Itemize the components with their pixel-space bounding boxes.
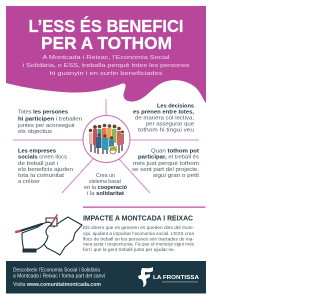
impact body text: cipi, ajudant a impulsar l’economia social. L’ESS crea <box>83 231 194 236</box>
text: decisions: de manera col·lectiva, <box>135 116 194 122</box>
impact body text: llocs de treball on les persones són tractades de ma- <box>83 236 194 241</box>
text: cooperation <box>84 173 127 197</box>
text: participation <box>17 110 82 135</box>
text: cooperation: sistema basat <box>89 179 122 185</box>
title: L’ESS ÉS BENEFICI <box>28 15 184 36</box>
text: participation: els objectius <box>18 129 52 135</box>
text: social enterprises: a créixer <box>18 179 40 185</box>
connector lines <box>13 99 199 193</box>
impact divider <box>83 206 206 208</box>
text: everyone participates: Quan tothom pot <box>151 148 199 154</box>
text: decisions: es prenen entre totes, <box>133 110 195 116</box>
text: everyone participates <box>132 148 200 179</box>
text: decisions <box>133 104 195 134</box>
text: social enterprises <box>18 148 73 185</box>
text: social enterprises: de treball just i <box>18 161 58 167</box>
intro text <box>22 55 190 77</box>
text: cooperation: Crea un <box>96 173 115 179</box>
footer panel <box>6 261 206 294</box>
text: cooperation: i la solidaritat <box>87 191 124 197</box>
text: decisions: tothom hi tingui veu <box>138 128 194 134</box>
text: social enterprises: Les empreses <box>18 148 56 154</box>
footer text: Visita www.comunitatmontcada.com <box>13 282 102 288</box>
text: social enterprises: tota la comunitat <box>18 173 65 179</box>
icon: hand voting over map <box>16 215 82 255</box>
logo: La Frontissa: LA FRONTISSA <box>153 275 200 281</box>
text: everyone participates: participar, el treball és <box>138 155 199 161</box>
header panel <box>6 6 206 103</box>
impact body text: Els diners que es generen es queden dins del muni- <box>83 225 194 230</box>
title: PER A TOTHOM <box>41 33 172 53</box>
text: participation: juntes per aconseguir <box>17 123 75 129</box>
intro text: A Montcada i Reixac, l’Economia Social <box>42 55 170 61</box>
impact heading: IMPACTE A MONTCADA I REIXAC <box>83 216 193 222</box>
people circle <box>83 116 130 162</box>
impact body text: nera justa i respectuosa. Fa que el municipi sigui més <box>83 242 195 247</box>
text: decisions: per assegurar que <box>146 122 194 128</box>
people illustration <box>89 124 124 154</box>
impact body text: fort i que la gent treballi junta per ajudar-se. <box>83 247 175 252</box>
logo: La Frontissa <box>138 267 200 287</box>
text: participation: hi participen i treballen <box>18 116 82 122</box>
text: participation: Totes les persones <box>18 110 68 116</box>
text: decisions: Les decisions <box>157 104 194 110</box>
text: cooperation: en la cooperació <box>84 185 127 191</box>
text: everyone participates: sigui gran o petit <box>153 173 200 179</box>
text: everyone participates: més just perquè tothom <box>133 161 199 167</box>
footer text: Descobreix l’Economia Social i Solidària <box>13 268 100 274</box>
text: social enterprises: els beneficis ajuden <box>18 167 73 173</box>
footer text <box>13 268 105 288</box>
impact body text <box>83 225 195 252</box>
intro text: hi guanyin i en surtin beneficiades <box>50 71 163 77</box>
title <box>28 15 184 53</box>
footer text: a Montcada i Reixac i forma part del canvi <box>13 274 105 280</box>
intro text: i Solidària, o ESS, treballa perquè totes les persones <box>22 63 190 69</box>
text: social enterprises: socials creen llocs <box>18 155 67 161</box>
text: everyone participates: se sent part del projecte, <box>132 167 199 173</box>
